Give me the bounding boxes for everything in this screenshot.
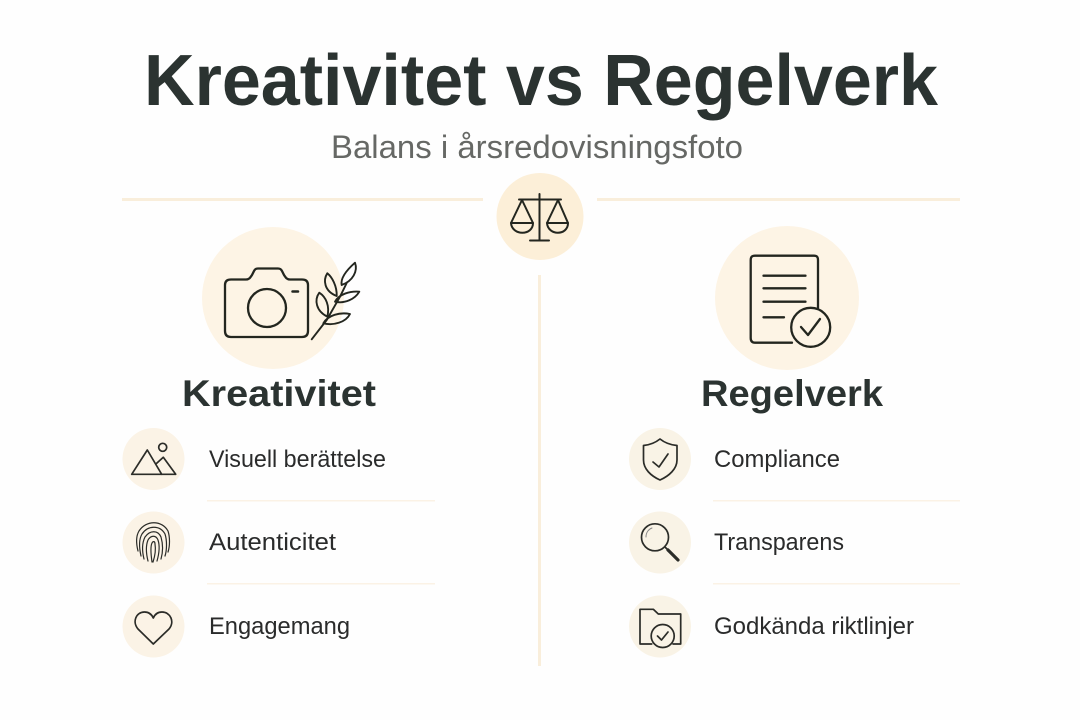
panel: Kreativitet xyxy=(122,227,435,658)
separator xyxy=(207,500,435,502)
row: Transparens: Transparens xyxy=(714,529,844,556)
row: Engagemang: Engagemang xyxy=(209,613,350,640)
title: Kreativitet vs Regelverk xyxy=(144,41,939,121)
row: Transparens xyxy=(629,512,844,574)
row: Visuell berättelse xyxy=(122,428,386,490)
row: Engagemang xyxy=(122,596,350,658)
row: Autenticitet: Autenticitet xyxy=(209,529,336,556)
icon: document with check xyxy=(715,226,859,370)
icon: camera with leaf branch xyxy=(202,227,359,369)
separator xyxy=(713,500,960,502)
row: Compliance xyxy=(629,428,840,490)
row: Visuell berättelse: Visuell berättelse xyxy=(209,446,386,473)
divider: top left xyxy=(122,198,483,201)
separator xyxy=(207,583,435,584)
heading: Regelverk: Regelverk xyxy=(701,373,883,414)
divider: top right xyxy=(597,198,960,201)
icon: balance scale xyxy=(496,173,584,260)
panel: Regelverk xyxy=(629,226,960,658)
divider: center vertical xyxy=(538,275,541,666)
separator xyxy=(713,583,960,584)
heading: Kreativitet: Kreativitet xyxy=(182,373,376,414)
row: Compliance: Compliance xyxy=(714,446,840,473)
row: Godkända riktlinjer: Godkända riktlinjer xyxy=(714,613,914,640)
subtitle: Balans i årsredovisningsfoto xyxy=(331,129,743,165)
row: Autenticitet xyxy=(122,512,336,574)
row: Godkända riktlinjer xyxy=(629,596,914,658)
